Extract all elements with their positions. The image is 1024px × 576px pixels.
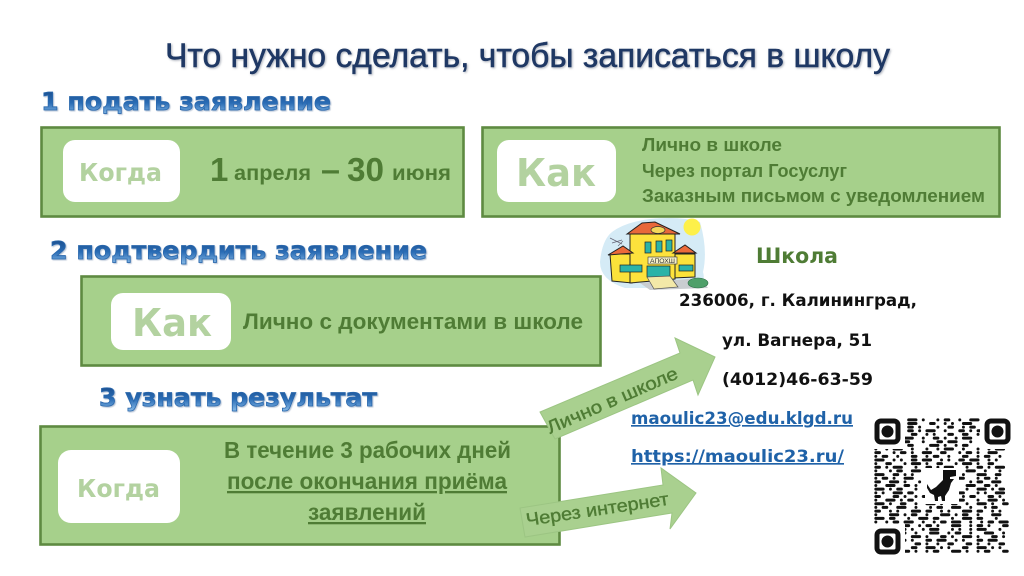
- heading: step 2: 2 подтвердить заявление: [50, 236, 427, 265]
- badge: how: Как: [132, 301, 212, 345]
- list of ways to apply: Через портал Госуслуг: [642, 161, 847, 181]
- badge: how: Как: [516, 151, 596, 195]
- arrow: via internet: Через интернет: [525, 489, 670, 530]
- list of ways to apply: Заказным письмом с уведомлением: [642, 186, 985, 206]
- result text: В течение 3 рабочих дней: [224, 437, 511, 463]
- icon: school building: [600, 218, 708, 290]
- dates: [210, 151, 451, 188]
- QR code: [872, 416, 1013, 557]
- icon: school building: АПОХШ: [650, 259, 675, 265]
- dates: 30: [347, 151, 384, 188]
- address line 1: 236006, г. Калининград,: [679, 291, 917, 311]
- badge: when: Когда: [77, 474, 160, 503]
- arrow: via internet: [520, 468, 696, 537]
- dates: июня: [392, 162, 451, 185]
- list of ways to apply: [642, 135, 985, 206]
- arrow: in person: Лично в школе: [544, 363, 681, 438]
- result text: заявлений: [308, 499, 426, 525]
- badge: how: [111, 293, 231, 350]
- dates: –: [321, 151, 340, 188]
- confirmation text: Лично с документами в школе: [243, 309, 583, 334]
- heading: step 1: 1 подать заявление: [41, 87, 331, 116]
- panel: step 1 when: [42, 128, 464, 216]
- title: Что нужно сделать, чтобы записаться в школу: [165, 37, 890, 75]
- badge: when: [63, 140, 180, 202]
- heading: step 3: 3 узнать результат: [99, 383, 378, 412]
- heading: school: Школа: [756, 244, 838, 268]
- dates: апреля: [234, 162, 311, 185]
- badge: when: Когда: [79, 158, 162, 187]
- dates: 1: [210, 151, 228, 188]
- result text: [224, 437, 511, 525]
- panel: step 1 how: [482, 128, 1000, 216]
- school contacts: [631, 244, 917, 466]
- address line 2: ул. Вагнера, 51: [722, 331, 872, 351]
- website: https://maoulic23.ru/: [631, 447, 845, 466]
- badge: how: [497, 140, 616, 202]
- email: maoulic23@edu.klgd.ru: [631, 409, 853, 428]
- result text: после окончания приёма: [227, 468, 507, 494]
- arrow: in person: [540, 338, 715, 439]
- icon: dinosaur: [927, 470, 956, 501]
- phone: (4012)46-63-59: [722, 370, 873, 390]
- list of ways to apply: Лично в школе: [642, 135, 782, 155]
- panel: step 2 how: [82, 276, 600, 366]
- badge: when: [58, 450, 180, 523]
- panel: step 3 when: [40, 426, 560, 544]
